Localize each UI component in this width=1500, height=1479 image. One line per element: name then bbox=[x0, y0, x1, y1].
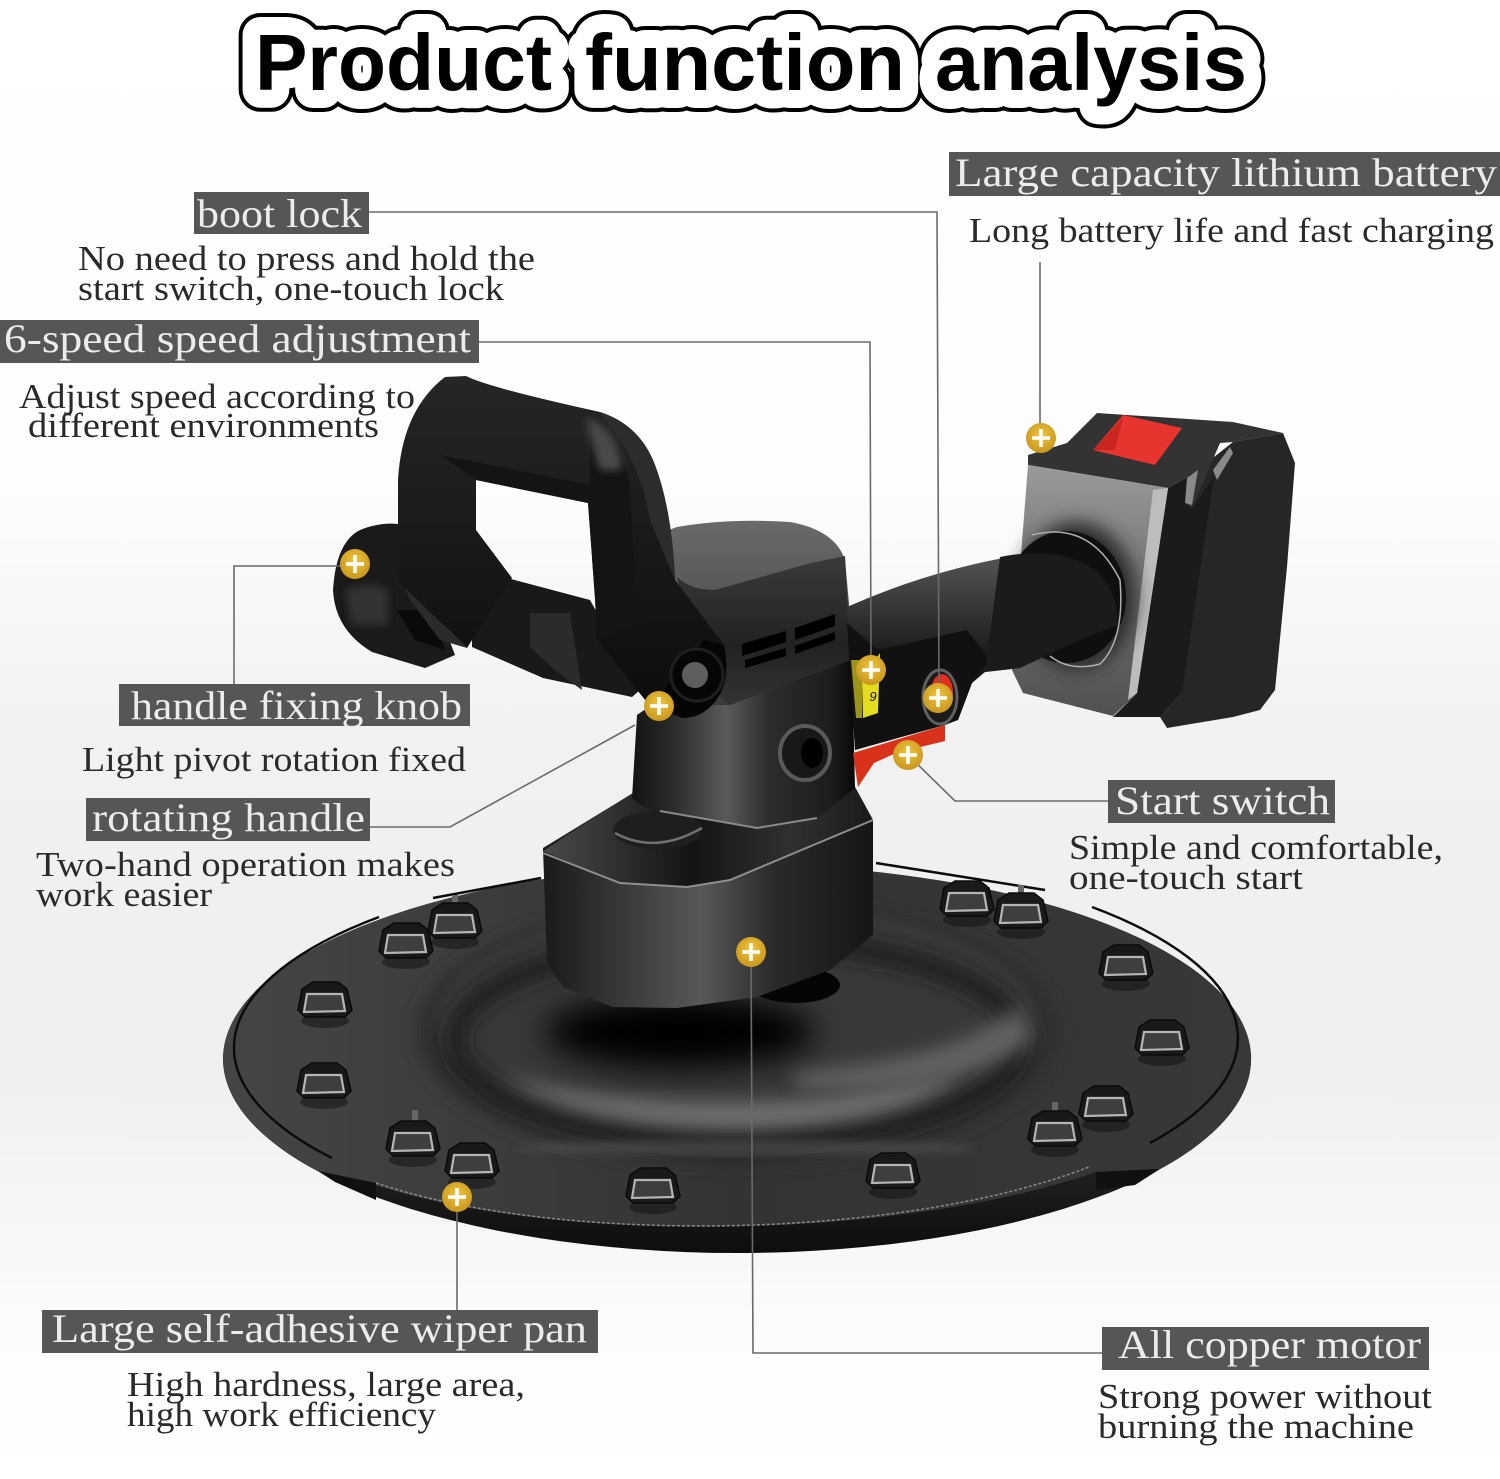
title: analysis bbox=[935, 18, 1247, 107]
callout: all copper motor: All copper motor bbox=[1118, 1322, 1421, 1367]
callout: start switch: Simple and comfortable, bbox=[1069, 828, 1443, 867]
callout: large self-adhesive wiper pan: high work efficiency bbox=[127, 1395, 437, 1434]
callout: rotating handle: rotating handle bbox=[92, 795, 365, 840]
callout: rotating handle bbox=[36, 795, 455, 914]
product: body column bbox=[632, 620, 855, 828]
title: analysis bbox=[935, 18, 1247, 107]
leader lines bbox=[234, 212, 1108, 1353]
title: function bbox=[585, 18, 905, 107]
title: function bbox=[585, 18, 905, 107]
callout: start switch: Start switch bbox=[1115, 778, 1330, 823]
title: analysis bbox=[935, 18, 1247, 107]
callout: handle fixing knob: handle fixing knob bbox=[131, 683, 462, 728]
product: arm and switch housing: 9 bbox=[869, 689, 877, 704]
callout: rotating handle: work easier bbox=[36, 875, 212, 914]
callout: 6-speed speed adjustment: different environments bbox=[28, 406, 379, 445]
title: Product bbox=[255, 18, 552, 107]
title: Product bbox=[255, 18, 552, 107]
callout: large capacity lithium battery: Large capacity lithium battery bbox=[955, 150, 1497, 195]
product: disc studs bbox=[297, 881, 1189, 1214]
title: Product bbox=[255, 18, 552, 107]
callout: rotating handle: Two-hand operation makes bbox=[36, 845, 455, 884]
product: disc dome bbox=[415, 900, 1059, 1164]
callout: start switch bbox=[1069, 778, 1443, 897]
callout: boot lock bbox=[78, 191, 535, 308]
title: analysis bbox=[935, 18, 1247, 107]
callout: boot lock: No need to press and hold the bbox=[78, 239, 535, 278]
hotspot markers bbox=[340, 423, 1056, 1212]
callout: all copper motor bbox=[1098, 1322, 1432, 1446]
callout: start switch: one-touch start bbox=[1069, 858, 1303, 897]
callout: large self-adhesive wiper pan bbox=[42, 1306, 598, 1434]
callout: all copper motor: Strong power without bbox=[1098, 1377, 1432, 1416]
callout: boot lock: boot lock bbox=[197, 191, 362, 236]
callout: 6-speed speed adjustment: Adjust speed according to bbox=[19, 377, 415, 416]
callout: large capacity lithium battery: Long battery life and fast charging bbox=[969, 211, 1494, 250]
callout: handle fixing knob: Light pivot rotation fixed bbox=[82, 740, 467, 779]
callout: large self-adhesive wiper pan: Large self-adhesive wiper pan bbox=[52, 1306, 587, 1351]
callout: 6-speed speed adjustment bbox=[0, 316, 479, 445]
callout: handle fixing knob bbox=[82, 683, 470, 779]
callout: large capacity lithium battery bbox=[949, 150, 1500, 250]
product: red trigger bbox=[853, 725, 945, 787]
callout: all copper motor: burning the machine bbox=[1098, 1407, 1414, 1446]
product: D handle bbox=[398, 376, 726, 718]
product: motor head bbox=[592, 521, 851, 705]
title: Product bbox=[255, 18, 552, 107]
callout: boot lock: start switch, one-touch lock bbox=[78, 269, 505, 308]
title bbox=[255, 18, 1247, 107]
product: base disc bbox=[223, 863, 1251, 1253]
product: rear knob bbox=[333, 524, 455, 668]
product: arm and switch housing bbox=[847, 555, 1080, 750]
title: function bbox=[585, 18, 905, 107]
callout: large self-adhesive wiper pan: High hardness, large area, bbox=[127, 1365, 525, 1404]
product: handle tube bbox=[472, 578, 640, 697]
product: motor housing block bbox=[543, 787, 873, 1008]
title: function bbox=[585, 18, 905, 107]
product: battery pack bbox=[985, 413, 1295, 728]
callout: 6-speed speed adjustment: 6-speed speed adjustment bbox=[4, 316, 471, 361]
